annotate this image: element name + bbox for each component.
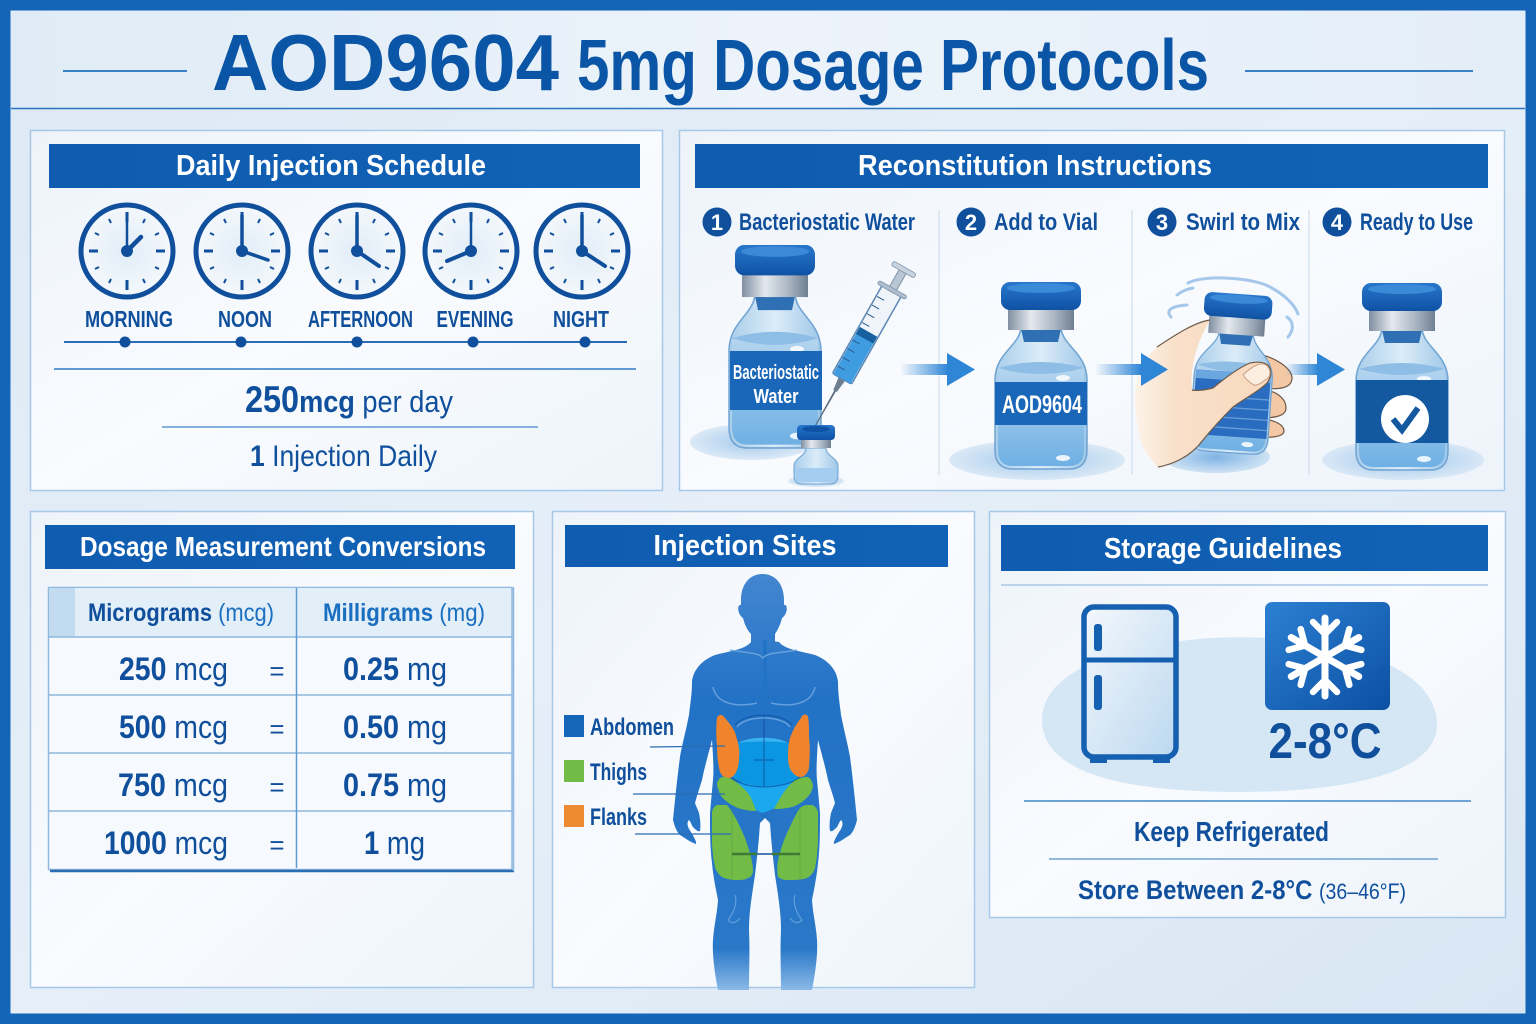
- table rows: 500 mcg: [119, 709, 228, 745]
- vial: bacteriostatic water: [690, 245, 822, 460]
- table rows: 0.50 mg: [343, 709, 447, 745]
- heading: storage: [1001, 525, 1488, 571]
- heading: storage: Storage Guidelines: [1104, 533, 1342, 565]
- palm and thumb: [1135, 320, 1271, 467]
- clock: morning: [81, 205, 173, 297]
- conversion table: Milligrams (mg): [323, 599, 485, 627]
- hand outlines: [1157, 320, 1271, 467]
- panel: storage guidelines: [990, 512, 1506, 918]
- step 2 label: 2: [965, 210, 977, 235]
- table rows: 250 mcg: [119, 651, 228, 687]
- heading: daily injection schedule: [49, 144, 640, 188]
- icon: snowflake tile: [1265, 602, 1390, 710]
- keep refrigerated: Keep Refrigerated: [1134, 816, 1329, 847]
- table rows: 1 mg: [364, 825, 425, 861]
- time labels: MORNING: [85, 306, 173, 332]
- table rows: 1000 mcg: [104, 825, 228, 861]
- vial: bacteriostatic water: Bacteriostatic: [733, 362, 819, 384]
- backdrop blob: [1042, 637, 1437, 792]
- table rows: =: [269, 830, 285, 860]
- table rows: 0.25 mg: [343, 651, 447, 687]
- step 3 label: Swirl to Mix: [1186, 209, 1301, 236]
- thumb nail: [1243, 364, 1270, 385]
- legend: abdomen: [564, 714, 674, 741]
- clock: noon: [196, 205, 288, 297]
- step 4 label: [1322, 208, 1473, 236]
- body figure: [673, 574, 857, 990]
- heading: reconstitution: Reconstitution Instructions: [858, 150, 1212, 182]
- heading: conversions: Dosage Measurement Conversions: [80, 531, 486, 562]
- vial: ready to use: [1322, 283, 1484, 480]
- dose text: 250mcg per day: [245, 379, 453, 420]
- fingers: [1258, 355, 1292, 437]
- vial: AOD9604: AOD9604: [1002, 391, 1082, 419]
- heading: conversions: [45, 525, 515, 569]
- table rows: =: [269, 714, 285, 744]
- arrow 2: [1095, 353, 1168, 386]
- panel: daily injection schedule: [30, 130, 662, 490]
- timeline: [64, 336, 627, 348]
- store between: Store Between 2-8°C (36–46°F): [1078, 875, 1406, 905]
- legend: thighs: Thighs: [590, 759, 647, 786]
- frequency text: 1 Injection Daily: [250, 440, 437, 473]
- heading: injection sites: Injection Sites: [654, 530, 836, 562]
- time labels: [85, 306, 609, 332]
- clock: afternoon: [311, 205, 403, 297]
- thigh zones: [712, 805, 753, 880]
- table header: Micrograms (mcg): [88, 599, 274, 627]
- temperature: 2-8°C: [1268, 713, 1382, 769]
- legend: abdomen: Abdomen: [590, 714, 674, 741]
- table rows: =: [269, 772, 285, 802]
- clock: evening: [425, 205, 517, 297]
- arrow 1: [900, 353, 975, 386]
- step 4 label: 4: [1331, 210, 1344, 235]
- table rows: [104, 651, 447, 861]
- title band: [11, 11, 1525, 108]
- legend: flanks: [564, 804, 647, 831]
- groin thigh zones: [717, 777, 756, 811]
- time labels: AFTERNOON: [308, 306, 413, 332]
- step 3 label: [1148, 208, 1301, 236]
- clock: night: [536, 205, 628, 297]
- step 4 label: Ready to Use: [1360, 209, 1473, 236]
- step 1 label: [702, 208, 915, 236]
- step 2 label: Add to Vial: [994, 209, 1098, 236]
- vial: AOD9604: [949, 282, 1125, 480]
- legend: thighs: [564, 759, 647, 786]
- heading: reconstitution: [695, 144, 1488, 188]
- time labels: NIGHT: [553, 306, 609, 332]
- small vial: [788, 425, 844, 487]
- syringe: [799, 259, 919, 437]
- step 1 label: Bacteriostatic Water: [739, 209, 915, 236]
- heading: daily injection schedule: Daily Injection Schedule: [176, 150, 486, 182]
- panel: reconstitution instructions: [680, 130, 1504, 490]
- heading: injection sites: [565, 525, 948, 567]
- table rows: =: [269, 656, 285, 686]
- vial: bacteriostatic water: Water: [754, 386, 799, 408]
- legend pointers: [633, 746, 731, 834]
- icon: fridge: [1084, 607, 1176, 763]
- flank zones: [716, 715, 739, 778]
- time labels: NOON: [218, 306, 272, 332]
- motion lines: [1169, 278, 1298, 337]
- hand swirling vial: [1135, 278, 1298, 473]
- time labels: EVENING: [436, 306, 514, 332]
- title: 5mg Dosage Protocols: [577, 26, 1209, 106]
- lower abdomen: [735, 782, 793, 813]
- legend: flanks: Flanks: [590, 804, 647, 831]
- conversion table: [48, 587, 514, 871]
- arrow 3: [1285, 353, 1345, 386]
- step 3 label: 3: [1156, 210, 1168, 235]
- panel: injection sites: [552, 512, 974, 990]
- table rows: 750 mcg: [118, 767, 228, 803]
- step 2 label: [956, 208, 1098, 236]
- step 1 label: 1: [711, 210, 723, 235]
- panel: dosage measurement conversions: [30, 512, 534, 988]
- abdomen zone: [727, 738, 800, 786]
- table rows: 0.75 mg: [343, 767, 447, 803]
- title: AOD9604: [212, 18, 559, 107]
